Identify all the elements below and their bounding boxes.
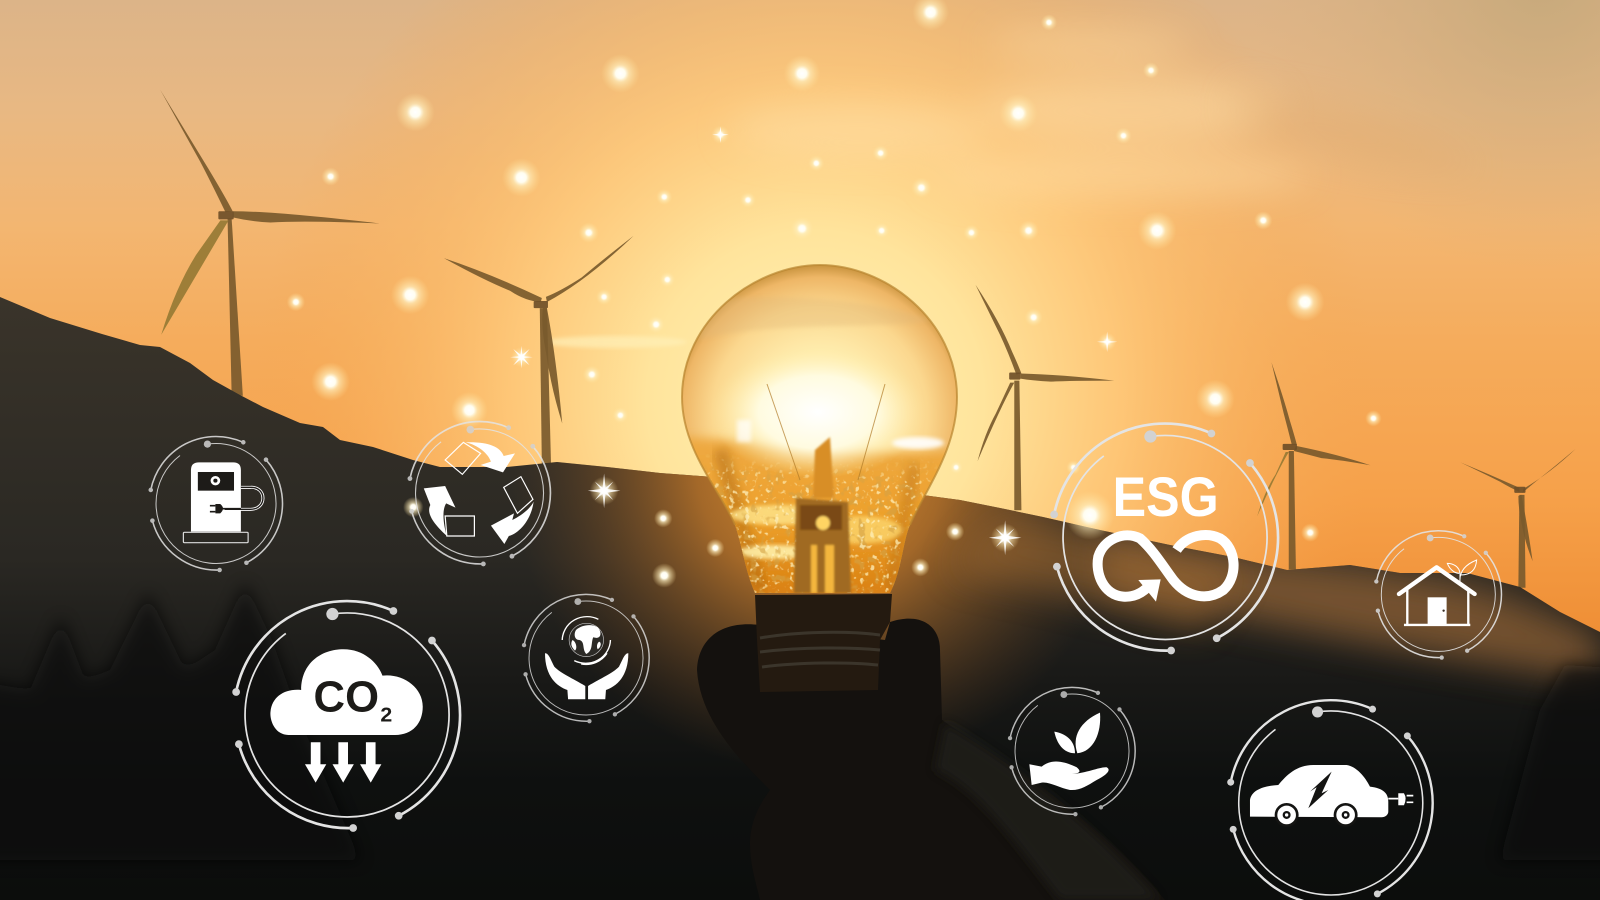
- glass rim: [682, 265, 957, 525]
- light bulb: [670, 255, 970, 692]
- turbine 5: [1460, 449, 1575, 588]
- icon: electric car with plug: [1250, 765, 1413, 827]
- turbine 4: [1257, 362, 1370, 569]
- icon: plant in hand: [1029, 713, 1109, 790]
- turbine 2: [444, 236, 634, 464]
- filament wires: [767, 384, 885, 480]
- icon: ESG infinity: ESG: [1113, 465, 1219, 528]
- bulb screw base: [755, 594, 892, 692]
- sparkles: [287, 0, 1382, 588]
- icon: CO2 cloud with down arrows: CO: [314, 673, 379, 721]
- icon: EV charging pump: [183, 462, 263, 543]
- icon: recycling arrows: [424, 442, 534, 544]
- icon: CO2 cloud with down arrows: [270, 649, 423, 783]
- icon ring: electric car: [1227, 700, 1433, 900]
- icon ring: earth in hands: [522, 594, 649, 723]
- bulb glass: [682, 265, 957, 593]
- icon ring: ESG: [1050, 424, 1278, 654]
- icon ring: CO2: [232, 601, 460, 832]
- icon: house with leaves: [1399, 560, 1477, 625]
- dark forest silhouette: [0, 583, 1600, 860]
- filament stem: [794, 437, 851, 593]
- icon: CO2 cloud with down arrows: 2: [380, 704, 392, 727]
- hand holding the bulb: [697, 619, 1165, 900]
- icon: ESG infinity: [1098, 465, 1234, 602]
- icon ring: hand with leaves: [1008, 687, 1135, 816]
- icon ring: recycling: [408, 422, 550, 566]
- turbine 1: [160, 90, 380, 396]
- icon: globe held by hands: [545, 617, 628, 699]
- mountain silhouette: [0, 297, 1600, 900]
- icon ring: eco house: [1374, 531, 1501, 660]
- turbine 3: [976, 285, 1114, 510]
- icon ring: charging station: [148, 436, 282, 572]
- wind turbines: [160, 90, 1575, 588]
